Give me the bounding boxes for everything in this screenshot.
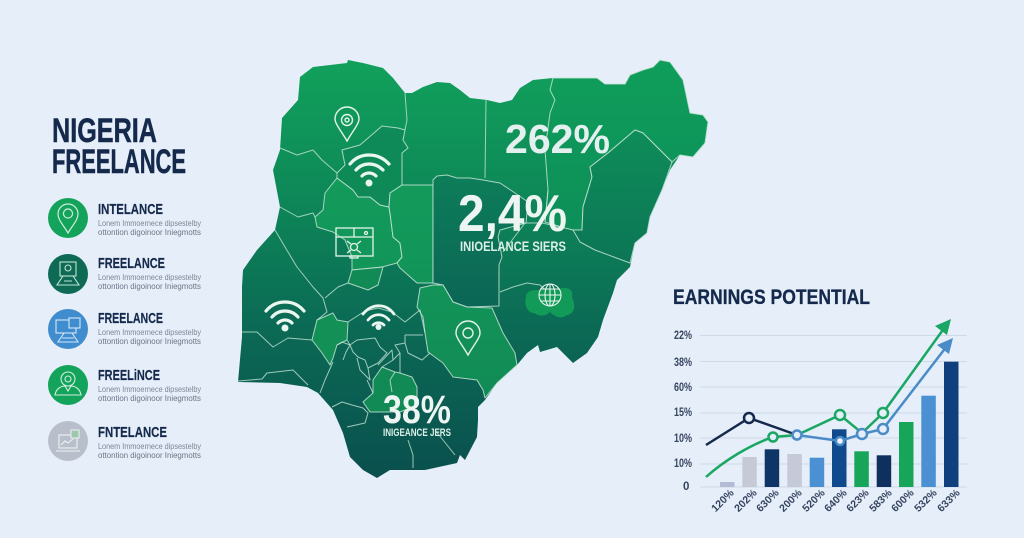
region: central north bbox=[315, 178, 402, 270]
item text: FREELiNCE bbox=[98, 367, 160, 384]
item text bbox=[98, 255, 202, 291]
y axis labels: 38% bbox=[674, 357, 692, 369]
y axis labels: 22% bbox=[674, 330, 692, 342]
item text: Lonem Immoernece dipsestelby bbox=[98, 272, 202, 282]
stat: 2,4%: INIOELANCE SIERS bbox=[460, 238, 566, 254]
earnings bar and line chart bbox=[674, 319, 967, 515]
x axis labels: 520% bbox=[800, 487, 828, 515]
icon: location pin in green circle bbox=[48, 198, 88, 238]
item text bbox=[98, 424, 202, 460]
icon: wifi west bbox=[266, 302, 304, 332]
x axis labels: 640% bbox=[822, 487, 850, 515]
y axis labels bbox=[674, 330, 692, 493]
icon: globe on green blob bbox=[525, 284, 574, 317]
icon: person in green circle bbox=[48, 365, 88, 405]
icon: wifi north bbox=[350, 155, 389, 186]
navy trend line bbox=[706, 418, 797, 445]
icon: monitor in blue circle bbox=[48, 309, 88, 349]
icon: location pin north west bbox=[335, 107, 359, 141]
title bbox=[52, 112, 186, 181]
x axis labels: 202% bbox=[732, 487, 760, 515]
icon: dashboard panel bbox=[336, 228, 373, 258]
y axis labels: 10% bbox=[674, 433, 692, 445]
item text: ottontion digoinoor Iniegmotts bbox=[98, 450, 201, 460]
icon: chart on laptop in grey circle bbox=[48, 421, 88, 461]
region: south east light with pin bbox=[417, 285, 517, 398]
region: light middle bbox=[389, 185, 433, 283]
item text: FNTELANCE bbox=[98, 424, 167, 441]
chart heading: EARNINGS POTENTIAL bbox=[673, 286, 870, 309]
y axis labels: 10% bbox=[674, 458, 692, 470]
stat: 38%: INIGEANCE JERS bbox=[383, 427, 451, 439]
x axis labels: 600% bbox=[889, 487, 917, 515]
stat: 262%: 262% bbox=[505, 116, 610, 162]
item text: Lonem Immoernece dipsestelby bbox=[98, 327, 202, 337]
y axis labels: 15% bbox=[674, 407, 692, 419]
x axis labels: 583% bbox=[867, 487, 895, 515]
item text: Lonem Immoernece dipsestelby bbox=[98, 441, 202, 451]
item text: FREELANCE bbox=[98, 310, 163, 327]
blue trend line with arrow bbox=[797, 338, 953, 441]
map of Nigeria bbox=[238, 60, 708, 478]
item text bbox=[98, 201, 202, 237]
item text: ottontion digoinoor Iniegmotts bbox=[98, 227, 201, 237]
x axis labels: 120% bbox=[709, 487, 737, 515]
state border lines bbox=[238, 93, 565, 468]
item 3 bbox=[48, 309, 202, 349]
item text: ottontion digoinoor Iniegmotts bbox=[98, 336, 201, 346]
title: NIGERIA bbox=[52, 112, 157, 150]
item text: Lonem Immoernece dipsestelby bbox=[98, 384, 202, 394]
region: north east dark bbox=[573, 130, 672, 263]
stat: 38%: 38% bbox=[383, 388, 451, 432]
item text: FREELANCE bbox=[98, 255, 165, 272]
x axis labels: 633% bbox=[935, 487, 963, 515]
item text: Lonem Immoernece dipsestelby bbox=[98, 218, 202, 228]
title: FREELANCE bbox=[52, 143, 186, 181]
x axis labels bbox=[709, 487, 963, 515]
item text: ottontion digoinoor Iniegmotts bbox=[98, 393, 201, 403]
icon: location pin south east bbox=[456, 321, 480, 355]
grid lines bbox=[700, 336, 967, 487]
x axis labels: 630% bbox=[754, 487, 782, 515]
region: central box bbox=[433, 175, 528, 307]
chart markers bbox=[744, 408, 888, 445]
icon: wifi central bbox=[363, 306, 394, 330]
list of freelance items bbox=[48, 198, 202, 461]
region: small north of centre wifi bbox=[348, 267, 383, 290]
region: wifi state bbox=[337, 126, 408, 207]
icon: freelancer at laptop in dark green circle bbox=[48, 254, 88, 294]
item 2 bbox=[48, 254, 202, 294]
item 4 bbox=[48, 365, 202, 405]
x axis labels: 200% bbox=[777, 487, 805, 515]
map silhouette bbox=[238, 60, 708, 478]
item text bbox=[98, 310, 202, 346]
y axis labels: 60% bbox=[674, 382, 692, 394]
item text bbox=[98, 367, 202, 403]
region: light southern bbox=[363, 367, 417, 412]
item 1 bbox=[48, 198, 202, 238]
item 5 bbox=[48, 421, 202, 461]
x axis labels: 623% bbox=[844, 487, 872, 515]
region: light western bbox=[312, 313, 348, 365]
green trend line with arrow bbox=[706, 319, 951, 477]
y axis labels: 0 bbox=[683, 481, 689, 493]
stat: 2,4%: 2,4% bbox=[458, 185, 567, 243]
item text: INTELANCE bbox=[98, 201, 163, 218]
bars bbox=[720, 362, 958, 487]
lighter and darker state regions bbox=[312, 60, 708, 412]
x axis labels: 532% bbox=[912, 487, 940, 515]
item text: ottontion digoinoor Iniegmotts bbox=[98, 281, 201, 291]
region: north east large bbox=[545, 60, 708, 230]
